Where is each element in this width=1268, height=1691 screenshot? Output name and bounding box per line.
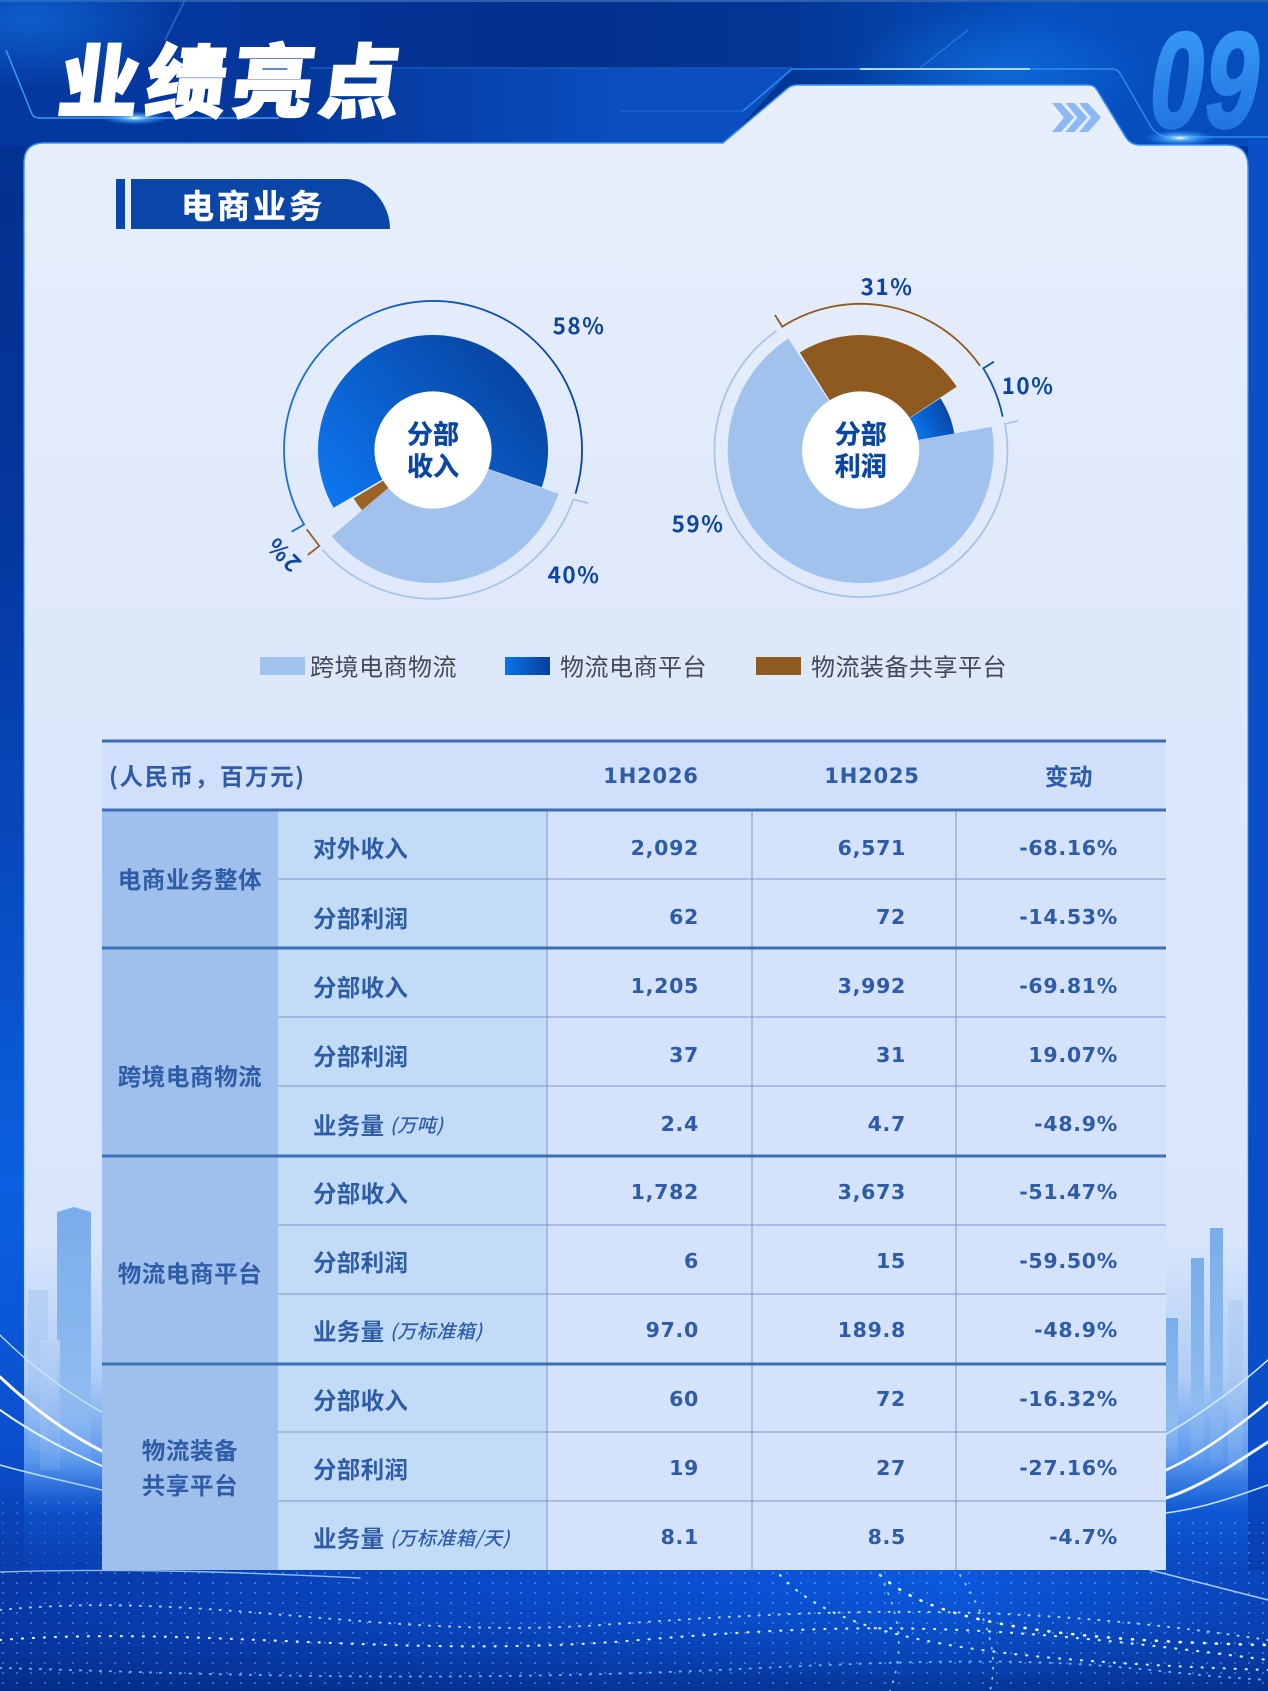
donut chart: segment profit: 31%: [861, 270, 913, 302]
donut chart: segment profit: 利润: [835, 446, 887, 484]
legend: 物流电商平台: [560, 648, 707, 682]
legend: [260, 648, 1007, 682]
group: e-commerce overall: 分部利润: [313, 900, 408, 934]
group: equipment sharing platform: 分部收入: [313, 1382, 408, 1416]
legend: 跨境电商物流: [310, 648, 457, 682]
group: e-commerce overall: -68.16%: [1019, 836, 1118, 860]
group: logistics e-commerce platform: 3,673: [838, 1180, 906, 1204]
section heading tab: [116, 179, 390, 229]
donut chart: segment revenue: 58%: [553, 309, 605, 341]
group: cross-border logistics: 31: [876, 1043, 906, 1067]
group: equipment sharing platform: -16.32%: [1019, 1387, 1118, 1411]
group: logistics e-commerce platform: 分部利润: [313, 1244, 408, 1278]
group: cross-border logistics: 37: [669, 1043, 699, 1067]
city skyline and light curves: [0, 1207, 1268, 1572]
chevron arrows: [1052, 103, 1101, 132]
group: logistics e-commerce platform: 6: [684, 1249, 699, 1273]
donut chart: segment profit: 59%: [672, 507, 724, 539]
table header row: [109, 758, 1093, 792]
group: cross-border logistics: 1,205: [631, 974, 699, 998]
legend: 物流装备共享平台: [811, 648, 1007, 682]
donut chart: segment revenue: [258, 301, 605, 599]
group: e-commerce overall: -14.53%: [1019, 905, 1118, 929]
group: logistics e-commerce platform: [118, 1175, 1118, 1347]
group: e-commerce overall: [118, 830, 1118, 934]
group: cross-border logistics: 4.7: [868, 1112, 906, 1136]
group: cross-border logistics: 19.07%: [1028, 1043, 1118, 1067]
group: equipment sharing platform: -27.16%: [1019, 1456, 1118, 1480]
section heading tab: 电商业务: [181, 180, 325, 228]
group: logistics e-commerce platform: 1,782: [631, 1180, 699, 1204]
group: equipment sharing platform: 业务量 (万标准箱/天): [313, 1520, 511, 1554]
group: logistics e-commerce platform: 物流电商平台: [118, 1255, 262, 1289]
group: cross-border logistics: 2.4: [661, 1112, 699, 1136]
group: equipment sharing platform: [142, 1382, 1118, 1554]
group: equipment sharing platform: 60: [669, 1387, 699, 1411]
group: logistics e-commerce platform: 分部收入: [313, 1175, 408, 1209]
group: logistics e-commerce platform: 189.8: [838, 1318, 906, 1342]
data table: [102, 741, 1166, 1570]
donut chart: segment revenue: 分部: [407, 414, 459, 452]
group: equipment sharing platform: 8.1: [661, 1525, 699, 1549]
group: logistics e-commerce platform: 业务量 (万标准箱): [313, 1313, 483, 1347]
group: cross-border logistics: -69.81%: [1019, 974, 1118, 998]
group: logistics e-commerce platform: -48.9%: [1034, 1318, 1118, 1342]
donut chart: segment revenue: 收入: [407, 446, 459, 484]
group: equipment sharing platform: 分部利润: [313, 1451, 408, 1485]
donut chart: segment profit: [672, 270, 1054, 597]
table header row: (人民币，百万元): [109, 758, 306, 792]
group: equipment sharing platform: -4.7%: [1049, 1525, 1118, 1549]
group: e-commerce overall: 电商业务整体: [118, 861, 262, 895]
group: e-commerce overall: 6,571: [838, 836, 906, 860]
donut chart: segment profit: 10%: [1002, 369, 1054, 401]
group: logistics e-commerce platform: 15: [876, 1249, 906, 1273]
group: e-commerce overall: 2,092: [631, 836, 699, 860]
group: logistics e-commerce platform: 97.0: [646, 1318, 699, 1342]
group: cross-border logistics: 3,992: [838, 974, 906, 998]
group: cross-border logistics: -48.9%: [1034, 1112, 1118, 1136]
page title: 业绩亮点: [53, 19, 415, 135]
table header row: 1H2026: [603, 764, 699, 788]
bottom dotted wave floor: [0, 1570, 1268, 1691]
group: logistics e-commerce platform: -59.50%: [1019, 1249, 1118, 1273]
table header row: 1H2025: [824, 764, 920, 788]
donut chart: segment revenue: 40%: [548, 558, 600, 590]
group: equipment sharing platform: 8.5: [868, 1525, 906, 1549]
group: logistics e-commerce platform: -51.47%: [1019, 1180, 1118, 1204]
group: equipment sharing platform: 27: [876, 1456, 906, 1480]
group: cross-border logistics: 分部利润: [313, 1038, 408, 1072]
group: e-commerce overall: 62: [669, 905, 699, 929]
group: e-commerce overall: 72: [876, 905, 906, 929]
group: e-commerce overall: 对外收入: [313, 830, 408, 864]
group: cross-border logistics: 分部收入: [313, 969, 408, 1003]
group: cross-border logistics: 业务量 (万吨): [313, 1107, 444, 1141]
group: equipment sharing platform: 物流装备: [142, 1432, 238, 1466]
header accent lines: [6, 0, 1268, 146]
donut chart: segment revenue: 2%: [258, 530, 308, 580]
donut chart: segment profit: 分部: [835, 414, 887, 452]
group: equipment sharing platform: 19: [669, 1456, 699, 1480]
table header row: 变动: [1045, 758, 1093, 792]
group: cross-border logistics: [118, 969, 1118, 1141]
group: equipment sharing platform: 72: [876, 1387, 906, 1411]
group: equipment sharing platform: 共享平台: [142, 1467, 238, 1501]
group: cross-border logistics: 跨境电商物流: [118, 1058, 262, 1092]
